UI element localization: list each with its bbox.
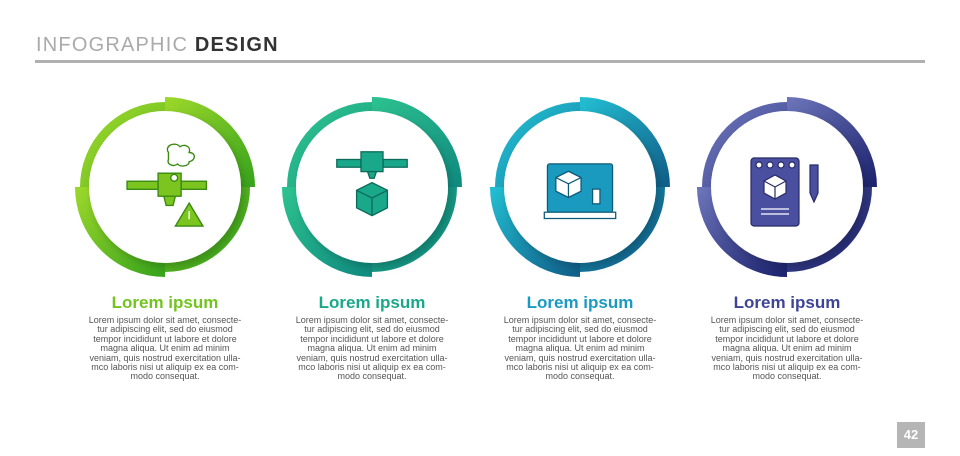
text 1: Lorem ipsum dolor sit amet, consecte- (89, 315, 241, 325)
text 1: tempor incididunt ut labore et dolore (93, 334, 237, 344)
heading 4: Lorem ipsum (734, 293, 840, 312)
icon: 3d printer head with cube (337, 152, 407, 216)
text 2: veniam, quis nostrud exercitation ulla- (296, 353, 448, 363)
title: INFOGRAPHIC DESIGN (36, 34, 279, 56)
text 2: magna aliqua. Ut enim ad minim (307, 343, 437, 353)
page number (897, 422, 925, 448)
text 3: magna aliqua. Ut enim ad minim (515, 343, 645, 353)
text 1: tur adipiscing elit, sed do eiusmod (97, 324, 233, 334)
text 4: tur adipiscing elit, sed do eiusmod (719, 324, 855, 334)
text 4: mco laboris nisi ut aliquip ex ea com- (713, 362, 861, 372)
text 3: tempor incididunt ut labore et dolore (508, 334, 652, 344)
text 1: modo consequat. (130, 371, 200, 381)
ring 4 (697, 97, 877, 277)
text 2: Lorem ipsum dolor sit amet, consecte- (296, 315, 448, 325)
ring 2 (282, 97, 462, 277)
panel: step 4 (697, 97, 877, 381)
icon: sketchbook and pen (751, 158, 818, 226)
text 3: mco laboris nisi ut aliquip ex ea com- (506, 362, 654, 372)
text 4: tempor incididunt ut labore et dolore (715, 334, 859, 344)
panel: step 3 (490, 97, 670, 381)
ring 1 (75, 97, 255, 277)
text 1 (89, 315, 241, 381)
text 2: modo consequat. (337, 371, 407, 381)
text 3: modo consequat. (545, 371, 615, 381)
text 2: tur adipiscing elit, sed do eiusmod (304, 324, 440, 334)
page number: 42 (904, 427, 918, 442)
text 1: veniam, quis nostrud exercitation ulla- (89, 353, 241, 363)
text 4: Lorem ipsum dolor sit amet, consecte- (711, 315, 863, 325)
text 3: Lorem ipsum dolor sit amet, consecte- (504, 315, 656, 325)
text 2 (296, 315, 448, 381)
heading 1: Lorem ipsum (112, 293, 218, 312)
text 2: mco laboris nisi ut aliquip ex ea com- (298, 362, 446, 372)
text 4: modo consequat. (752, 371, 822, 381)
text 4: magna aliqua. Ut enim ad minim (722, 343, 852, 353)
heading 3: Lorem ipsum (527, 293, 633, 312)
text 3: veniam, quis nostrud exercitation ulla- (504, 353, 656, 363)
text 3 (504, 315, 656, 381)
icon: laptop with cube (544, 164, 616, 218)
text 2: tempor incididunt ut labore et dolore (300, 334, 444, 344)
icon: printer error (127, 144, 206, 226)
panel: step 2 (282, 97, 462, 381)
text 1: mco laboris nisi ut aliquip ex ea com- (91, 362, 239, 372)
text 4 (711, 315, 863, 381)
text 4: veniam, quis nostrud exercitation ulla- (711, 353, 863, 363)
panel: step 1 (75, 97, 255, 381)
heading 2: Lorem ipsum (319, 293, 425, 312)
text 3: tur adipiscing elit, sed do eiusmod (512, 324, 648, 334)
ring 3 (490, 97, 670, 277)
text 1: magna aliqua. Ut enim ad minim (100, 343, 230, 353)
